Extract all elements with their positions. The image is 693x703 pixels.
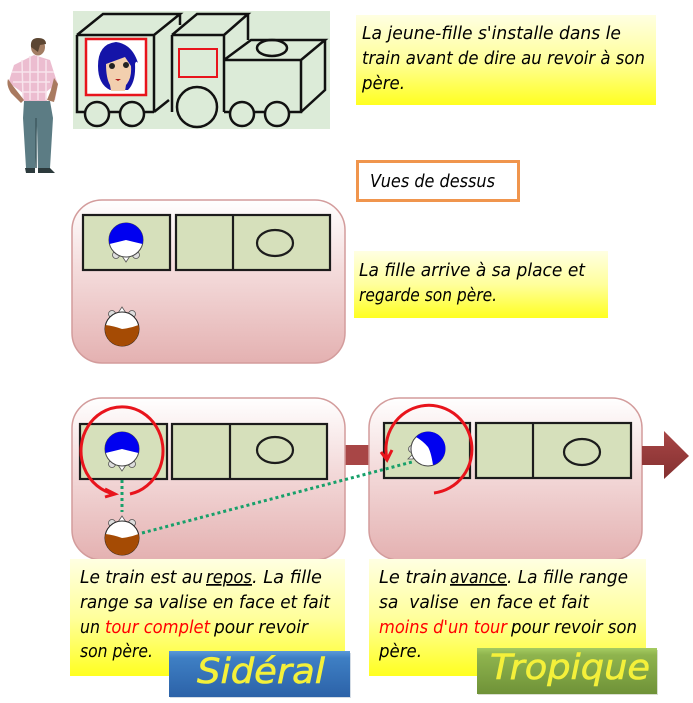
red full-turn arrow [81, 407, 163, 497]
girl head top view [109, 223, 143, 262]
father head top view [105, 516, 139, 555]
button: Tropique: Tropique [490, 648, 650, 688]
text box: tropical: Le train [379, 568, 447, 588]
button: Sidéral [169, 651, 351, 698]
text box: sidereal: Le train est au [80, 568, 203, 588]
text box: tropical: moins d'un tour [379, 618, 509, 638]
label: vues de dessus [358, 162, 518, 200]
text box: tropical: pour revoir son [510, 618, 637, 638]
red partial-turn arrow [381, 405, 472, 493]
text box: arrival: regarde son père. [359, 286, 497, 306]
text box: installation: père. [361, 74, 405, 94]
train outline [77, 14, 325, 127]
girl head rotated [408, 432, 445, 466]
text box: sidereal: tour complet [105, 618, 211, 638]
red window with girl [86, 39, 146, 95]
panel: train at rest [72, 398, 345, 560]
text box: tropical: avance [450, 568, 507, 588]
train background [73, 11, 330, 129]
text box: sidereal [70, 559, 345, 676]
red empty window [179, 49, 217, 77]
panel: arrival [72, 200, 345, 363]
text box: tropical: père. [378, 642, 422, 662]
text box: tropical [369, 559, 646, 676]
text box: sidereal: range sa valise en face et fait [80, 593, 331, 613]
arrow: direction of travel [642, 431, 689, 479]
man seen from behind [7, 38, 58, 173]
train top view [384, 423, 631, 478]
text box: sidereal: un [80, 618, 100, 638]
text box: sidereal: . La fille [252, 568, 322, 588]
text box: sidereal: pour revoir [213, 618, 310, 638]
panel: train moving [369, 398, 642, 560]
green sight lines [122, 462, 412, 533]
text box: installation: train avant de dire au revoir à son [362, 49, 645, 69]
train top view [83, 215, 330, 270]
father head top view [105, 307, 139, 346]
girl head top view [105, 432, 139, 471]
text box: arrival [354, 251, 608, 318]
text box: sidereal: son père. [80, 642, 153, 662]
train top view [80, 424, 327, 479]
text box: sidereal: repos [206, 568, 252, 588]
text box: installation [356, 15, 656, 105]
button: Sidéral: Sidéral [197, 652, 325, 692]
label: vues de dessus: Vues de dessus [370, 172, 495, 192]
text box: tropical: sa valise en face et fait [379, 593, 590, 613]
arrow: between panels [345, 445, 370, 465]
train illustration [73, 11, 330, 129]
text box: tropical: . La fille range [507, 568, 628, 588]
text box: arrival: La fille arrive à sa place et [359, 261, 586, 281]
text box: installation: La jeune-fille s'installe dans le [362, 24, 621, 44]
